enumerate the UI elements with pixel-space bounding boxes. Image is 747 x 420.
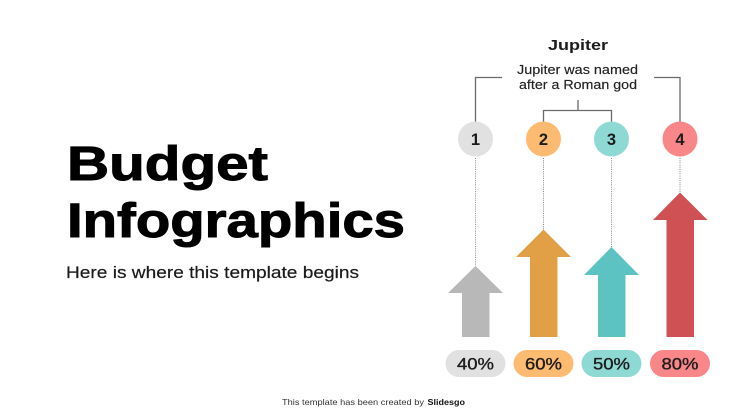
title (67, 138, 405, 248)
number badge 3 (594, 122, 629, 156)
column 4 (650, 122, 710, 377)
arrow: orange 60% (516, 230, 571, 337)
column 1 (446, 122, 506, 377)
number badge 4: 4 (675, 131, 685, 149)
pill: 80%: 80% (662, 356, 699, 374)
number badge 2: 2 (539, 131, 548, 149)
pill: 60% (514, 350, 574, 377)
description text: after a Roman god (519, 78, 637, 92)
column 2 (514, 122, 574, 377)
footer credit: This template has been created by (282, 397, 425, 407)
connector lines (476, 78, 680, 122)
pill: 40% (446, 350, 506, 377)
pill: 60%: 60% (525, 356, 562, 374)
pill: 40%: 40% (457, 356, 494, 374)
number badge 1 (458, 122, 493, 156)
pill: 50%: 50% (593, 356, 630, 374)
pill: 80% (650, 350, 710, 377)
title: Infographics (67, 195, 405, 248)
column 3 (582, 122, 642, 377)
number badge 3: 3 (607, 131, 616, 149)
footer credit: Slidesgo (428, 397, 465, 407)
title: Budget (67, 138, 268, 191)
description text (517, 63, 638, 92)
number badge 1: 1 (471, 131, 480, 149)
number badge 2 (526, 122, 561, 156)
subtitle: Here is where this template begins (66, 264, 359, 282)
heading: Jupiter: Jupiter (548, 37, 608, 54)
number badge 4 (662, 122, 698, 156)
description text: Jupiter was named (517, 63, 638, 77)
dotted drop lines (476, 158, 680, 266)
arrow: red 80% (653, 192, 708, 337)
pill: 50% (582, 350, 642, 377)
arrow: grey 40% (448, 266, 503, 337)
arrow: teal 50% (584, 247, 639, 337)
